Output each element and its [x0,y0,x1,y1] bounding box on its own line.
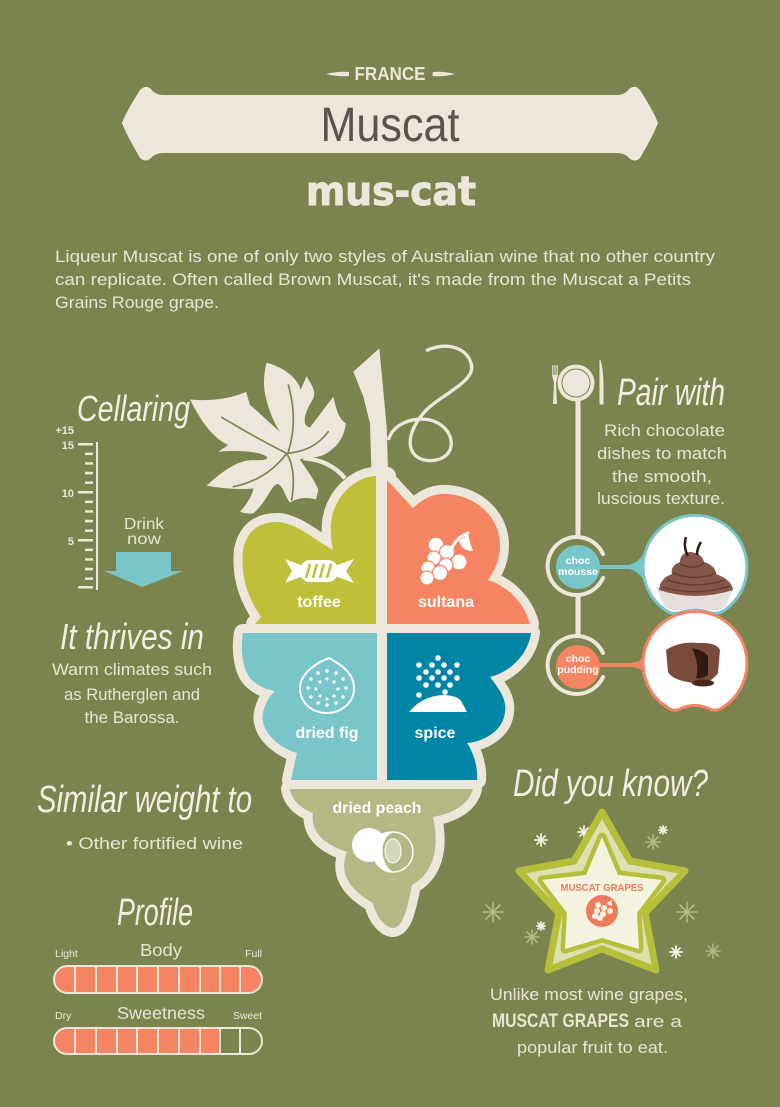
did you know text: are a [634,1013,683,1031]
profile: sweetness bar [54,1003,262,1054]
pairing: choc pudding [556,611,747,710]
heading: profile: Profile [117,892,193,934]
thrives text: the Barossa. [84,709,180,727]
did you know text [490,986,688,1057]
did you know text: popular fruit to eat. [517,1039,668,1057]
did you know text: MUSCAT GRAPES [492,1011,629,1032]
pairing: choc mousse: mousse [558,566,598,578]
pairing: choc pudding: choc [566,653,590,665]
heading: did you know: Did you know? [513,763,709,805]
heading: similar weight to: Similar weight to [37,779,252,821]
pronunciation: mus-cat [306,169,476,215]
intro paragraph: Grains Rouge grape. [55,294,219,312]
segment: sultana: sultana [418,594,474,611]
cellaring scale: 5 [68,536,74,548]
pairing text [597,422,727,508]
segment: toffee [242,476,376,624]
pairing text: Rich chocolate [604,422,725,440]
grape-bunch aroma wheel [242,476,531,928]
did you know text: Unlike most wine grapes, [490,986,688,1004]
heading: pair with: Pair with [617,372,725,414]
profile: sweetness bar: Sweet [233,1010,262,1022]
pairing text: luscious texture. [597,490,725,508]
profile: sweetness bar: Dry [55,1010,72,1022]
cellaring scale: 15 [62,440,74,452]
pairing timeline [548,400,603,694]
segment: dried fig: dried fig [295,725,359,742]
segment: dried fig [242,633,377,780]
segment: toffee: toffee [297,594,341,611]
segment: spice: spice [415,725,456,742]
cellaring scale: +15 [55,425,74,437]
pairing text: dishes to match [597,445,727,463]
title banner [122,87,658,160]
profile: body bar: Full [245,948,262,960]
heading: it thrives in: It thrives in [60,616,204,657]
heading: cellaring: Cellaring [77,388,190,429]
intro paragraph: can replicate. Often called Brown Muscat, it's made from the Muscat a Petits [55,271,691,289]
pairing: choc mousse: choc [566,555,590,567]
profile: body bar [54,940,262,993]
header: country label: FRANCE [354,64,426,84]
drink now arrow [104,516,183,587]
intro paragraph: Liqueur Muscat is one of only two styles of Australian wine that no other country [55,248,716,266]
segment: dried peach [290,789,473,928]
drink now arrow: Drink [124,516,164,533]
profile: sweetness bar: Sweetness [117,1003,205,1023]
cellaring scale [55,425,98,590]
pairing text: the smooth, [612,468,712,486]
star badge [519,812,685,970]
similar weight text: • Other fortified wine [66,835,243,853]
thrives text: as Rutherglen and [64,686,200,704]
cellaring scale: 10 [62,488,74,500]
vine: leaf, stem and tendril [190,346,472,514]
decorative stars [483,826,720,958]
pairing: choc mousse [556,515,747,613]
thrives text: Warm climates such [52,661,212,679]
thrives text [52,661,212,727]
drink now arrow: now [127,531,162,548]
icon: plate and cutlery [552,360,603,404]
profile: body bar: Light [55,948,78,960]
header: country label [326,64,455,84]
star badge: MUSCAT GRAPES [560,882,644,894]
intro paragraph [55,248,716,312]
pairing: choc pudding: pudding [557,664,599,676]
title banner: Muscat [320,99,460,152]
segment: dried peach: dried peach [332,800,422,817]
profile: body bar: Body [140,940,182,960]
segment: spice [387,633,531,780]
segment: sultana [387,480,530,624]
